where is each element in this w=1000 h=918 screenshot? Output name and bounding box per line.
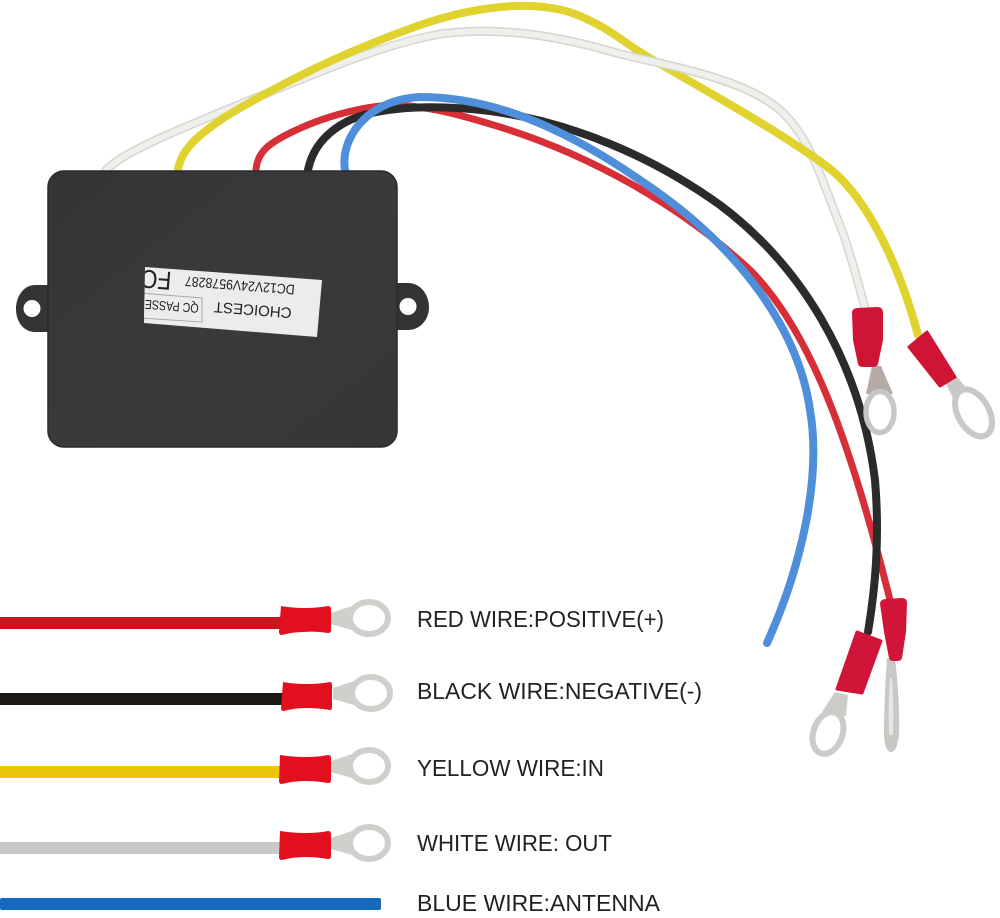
terminal: red wire [880,598,907,752]
mounting ear left [16,285,60,332]
blue wire [344,97,813,643]
label: black wire: BLACK WIRE:NEGATIVE(-) [417,678,702,704]
label: red wire: RED WIRE:POSITIVE(+) [417,606,664,632]
terminal: black wire [807,632,881,758]
white wire [106,31,866,312]
yellow wire crossing over white [735,107,918,335]
label: white wire: WHITE WIRE: OUT [417,830,612,856]
legend: red wire [0,602,388,635]
control box [16,171,429,447]
label: blue wire: BLUE WIRE:ANTENNA [417,890,661,916]
legend: white wire [0,827,388,860]
label text: model: DC12V24V9578287 [184,273,295,298]
label: yellow wire: YELLOW WIRE:IN [417,755,604,781]
terminal: white wire [852,307,894,432]
legend: yellow wire [0,750,388,784]
label text: brand: CHOICEST [213,298,292,321]
terminal: yellow wire [909,332,1000,443]
white wire crossing over yellow [440,31,780,110]
label text: FCC mark: FC [140,264,172,296]
label text: QC: QC PASSE [144,297,199,316]
label box: QC [140,293,202,322]
yellow wire [178,6,918,335]
box body [48,171,397,447]
mounting ear right [385,283,429,330]
black wire [308,107,877,632]
legend: black wire [0,677,390,711]
product label [140,264,322,337]
legend: blue wire [0,898,381,910]
red wire [256,105,890,600]
